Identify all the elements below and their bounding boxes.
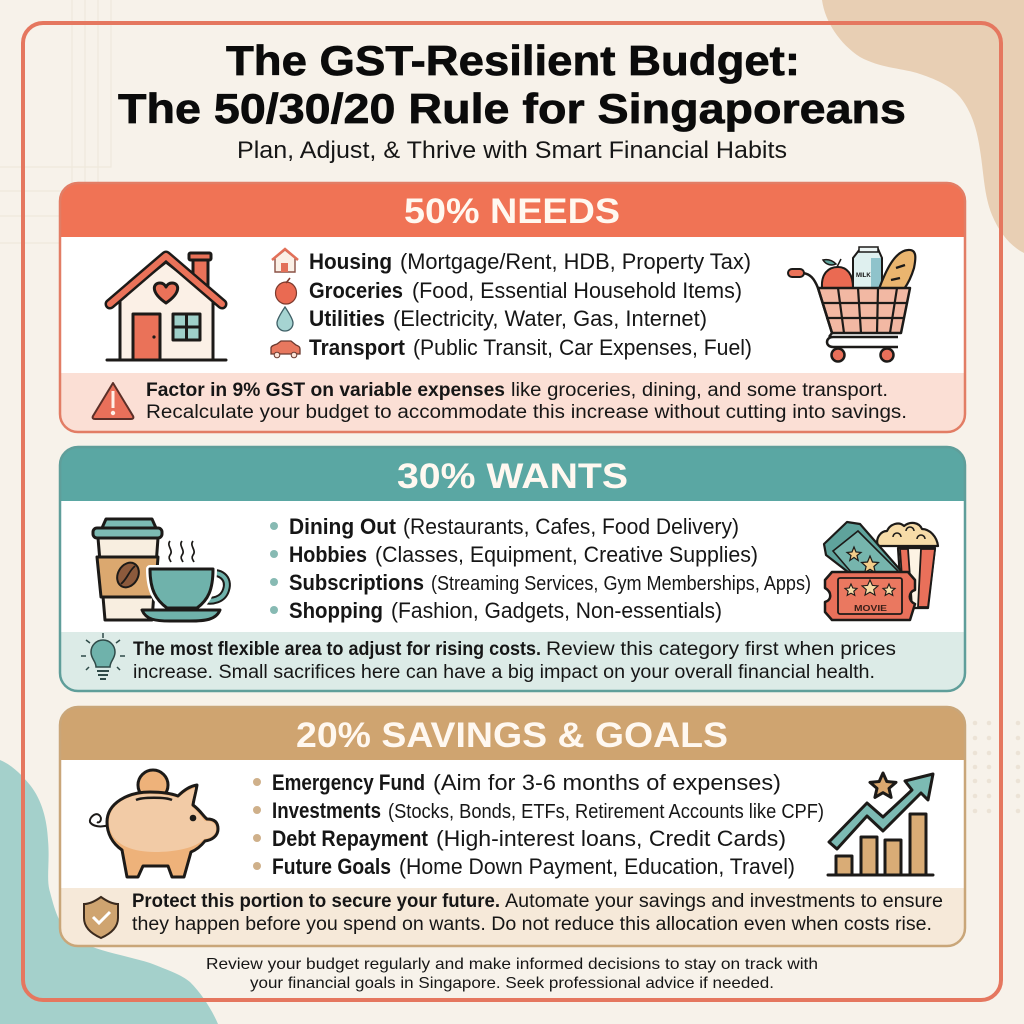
callout: flexible area tip: Review this category first when prices — [546, 639, 896, 660]
icon: movie tickets and popcorn: MOVIE — [854, 603, 887, 613]
list: savings items: Emergency Fund — [272, 770, 425, 795]
list: savings items — [253, 770, 824, 879]
callout: protect savings: they happen before you spend on wants. Do not reduce this allocation even when costs rise. — [132, 914, 932, 935]
callout: flexible area tip: increase. Small sacrifices here can have a big impact on your overall financial health. — [133, 662, 875, 683]
callout: GST warning: Factor in 9% GST on variable expenses — [146, 380, 505, 401]
list: wants items: Shopping — [289, 598, 383, 623]
icon: coffee cups — [93, 519, 227, 621]
list: savings items: (Home Down Payment, Education, Travel) — [399, 854, 795, 879]
list: needs items: (Mortgage/Rent, HDB, Property Tax) — [400, 249, 751, 274]
list: needs items: (Food, Essential Household Items) — [412, 278, 742, 303]
list: savings items: Debt Repayment — [272, 826, 429, 851]
callout: flexible area tip — [81, 633, 896, 683]
list: needs items: Utilities — [309, 306, 385, 331]
list: wants items: (Restaurants, Cafes, Food Delivery) — [403, 514, 739, 539]
list: wants items: (Streaming Services, Gym Memberships, Apps) — [431, 573, 811, 595]
icon: small house — [272, 249, 298, 272]
list: needs items: (Public Transit, Car Expenses, Fuel) — [413, 335, 752, 360]
icon: water drop — [277, 307, 293, 331]
background blob: teal bottom left — [0, 760, 218, 1024]
panel: 20% savings and goals — [60, 707, 965, 946]
icon: shield — [84, 897, 118, 938]
list: savings items: Future Goals — [272, 854, 391, 879]
list: savings items: (Stocks, Bonds, ETFs, Retirement Accounts like CPF) — [388, 801, 824, 823]
panel: 30% wants — [60, 447, 965, 691]
heading: 20% savings and goals: 20% SAVINGS & GOALS — [296, 716, 728, 755]
footer note — [206, 956, 818, 992]
callout: GST warning — [93, 380, 907, 423]
list: needs items: Housing — [309, 249, 392, 274]
icon: shopping cart — [788, 247, 915, 362]
callout: protect savings: Automate your savings and investments to ensure — [505, 891, 943, 912]
callout: flexible area tip: The most flexible area to adjust for rising costs. — [133, 639, 541, 660]
list: wants items: (Classes, Equipment, Creative Supplies) — [375, 542, 758, 567]
callout: GST warning: like groceries, dining, and some transport. — [511, 380, 888, 401]
callout: GST warning: Recalculate your budget to accommodate this increase without cutting into savings. — [146, 402, 907, 423]
icon: growth chart — [828, 773, 933, 875]
list: wants items: (Fashion, Gadgets, Non-essentials) — [391, 598, 722, 623]
list: wants items: Dining Out — [289, 514, 397, 539]
list: savings items: (Aim for 3-6 months of expenses) — [433, 770, 781, 795]
list: needs items — [271, 249, 752, 360]
list: wants items — [270, 514, 811, 623]
heading: 50% needs: 50% NEEDS — [404, 192, 620, 231]
icon: piggy bank — [90, 770, 218, 877]
bullets — [270, 522, 278, 614]
list: wants items: Hobbies — [289, 542, 367, 567]
icon: house — [107, 253, 226, 360]
list: needs items: Groceries — [309, 278, 403, 303]
icon: car — [271, 341, 300, 358]
callout: protect savings — [84, 891, 943, 938]
footer note: your financial goals in Singapore. Seek professional advice if needed. — [250, 975, 774, 992]
icon: apple — [276, 278, 296, 304]
title: The 50/30/20 Rule for Singaporeans — [118, 85, 906, 132]
background: dot pattern — [973, 721, 1020, 813]
list: needs items: Transport — [309, 335, 406, 360]
icon: shopping cart: MILK — [856, 273, 871, 279]
heading: 30% wants: 30% WANTS — [397, 457, 628, 496]
icon: lightbulb — [81, 633, 125, 679]
list: needs items: (Electricity, Water, Gas, Internet) — [393, 306, 707, 331]
bullets — [253, 778, 261, 870]
list: savings items: Investments — [272, 798, 381, 823]
footer note: Review your budget regularly and make informed decisions to stay on track with — [206, 956, 818, 973]
callout: protect savings: Protect this portion to secure your future. — [132, 891, 500, 912]
title: The GST-Resilient Budget: — [226, 37, 800, 84]
background blob: tan top right — [822, 0, 1024, 253]
background: corner grid lines — [0, 0, 111, 243]
icon: movie tickets and popcorn — [824, 522, 938, 620]
panel: 50% needs — [60, 183, 965, 432]
icon: warning triangle — [93, 383, 133, 419]
title — [118, 37, 906, 132]
list: savings items: (High-interest loans, Credit Cards) — [436, 826, 786, 851]
subtitle: Plan, Adjust, & Thrive with Smart Financial Habits — [237, 137, 787, 164]
list: wants items: Subscriptions — [289, 570, 424, 595]
